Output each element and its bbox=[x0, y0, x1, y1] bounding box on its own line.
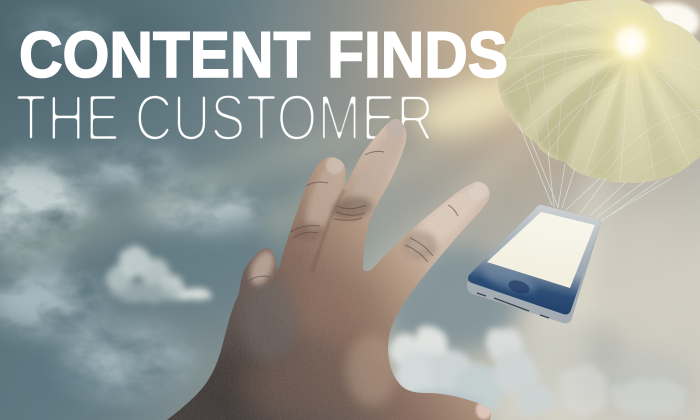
phone ports bbox=[477, 293, 549, 318]
suspension lines bbox=[518, 122, 672, 222]
reflection in phone glass bbox=[481, 263, 539, 297]
skin grain bbox=[168, 151, 483, 420]
hand silhouette bbox=[167, 119, 491, 420]
light rays bbox=[0, 60, 620, 420]
canopy ribs bbox=[500, 0, 700, 183]
smartphone bbox=[467, 205, 601, 323]
parachute bbox=[490, 0, 700, 222]
white cloud behind canopy bbox=[636, 2, 700, 42]
phone body bbox=[468, 205, 600, 314]
hand bbox=[160, 110, 500, 420]
shadow between ring and middle finger bbox=[312, 190, 344, 272]
canopy shaded panels bbox=[500, 26, 700, 183]
finger knuckle shadows bbox=[330, 194, 374, 222]
title line one: CONTENT FINDS bbox=[19, 18, 508, 91]
fingernails bbox=[386, 119, 404, 134]
bright clouds bbox=[105, 246, 688, 419]
title line two: THE CUSTOMER bbox=[15, 81, 434, 154]
canopy bbox=[498, 0, 700, 183]
sun glow on canopy bbox=[589, 0, 673, 84]
knuckle and skin shading bbox=[202, 361, 246, 396]
phone silver edge bbox=[467, 206, 601, 323]
lit finger tops bbox=[304, 168, 344, 232]
phone home button bbox=[507, 278, 531, 296]
finger creases bbox=[249, 151, 458, 281]
phone screen bbox=[487, 212, 595, 288]
suspension lines over canopy bbox=[515, 0, 700, 200]
faint clouds bbox=[0, 16, 267, 396]
title bbox=[15, 18, 508, 154]
